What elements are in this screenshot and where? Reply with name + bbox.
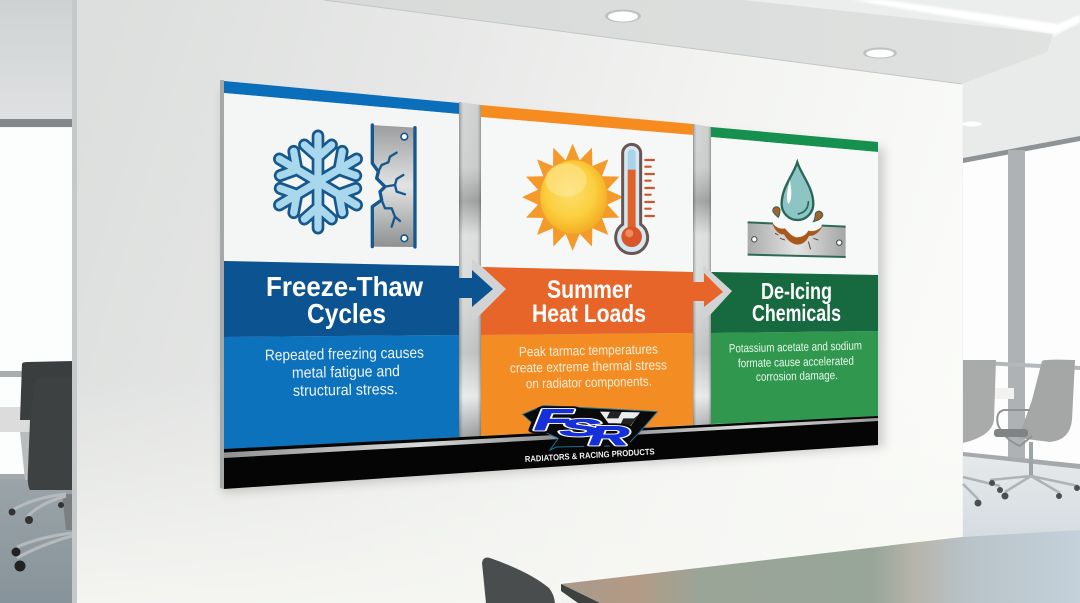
body text: summer heat — [510, 342, 667, 391]
wall sign — [220, 80, 878, 489]
heading: summer heat loads: Heat Loads — [532, 300, 646, 328]
heading: summer heat loads — [532, 276, 646, 328]
dark green heading band — [711, 272, 878, 333]
body text: summer heat: Peak tarmac temperatures — [519, 342, 658, 359]
FSR lettering: R — [589, 421, 630, 451]
body text: freeze-thaw: structural stress. — [293, 381, 398, 400]
FSR lettering: F — [534, 404, 573, 437]
heading: de-icing chemicals: De-Icing — [761, 278, 832, 304]
dark blue heading band — [224, 261, 459, 337]
body text: de-icing: corrosion damage. — [756, 368, 838, 384]
FSR lettering: F — [534, 404, 573, 437]
blue top bar — [224, 81, 459, 114]
body text: de-icing — [729, 338, 862, 384]
white icon area — [224, 93, 459, 266]
ceiling — [324, 0, 1080, 84]
steel divider two — [693, 124, 711, 426]
foreground chair back — [482, 558, 555, 603]
FSR lettering: R — [589, 421, 630, 451]
body text: summer heat: create extreme thermal stress — [510, 357, 667, 376]
heading: freeze-thaw cycles: Cycles — [307, 298, 386, 329]
panel: freeze-thaw — [224, 81, 459, 450]
orange top bar — [481, 105, 693, 135]
downlights — [605, 10, 982, 126]
right floor — [963, 456, 1080, 603]
panel: de-icing — [711, 127, 878, 424]
heading: freeze-thaw cycles: Freeze-Thaw — [266, 271, 424, 302]
FSR lettering: F — [534, 404, 573, 437]
body text: de-icing: Potassium acetate and sodium — [729, 338, 862, 355]
logo: FSR — [523, 404, 657, 464]
left chairs — [8, 361, 73, 572]
green text area — [711, 331, 878, 424]
green top bar — [711, 127, 878, 152]
body text: de-icing: formate cause accelerated — [738, 354, 854, 370]
body text: freeze-thaw — [265, 345, 424, 400]
heading: de-icing chemicals — [752, 278, 841, 326]
icon: thermometer — [616, 144, 654, 254]
icon: snowflake — [273, 136, 363, 228]
right chairs — [963, 360, 1080, 506]
light blue text area — [224, 335, 459, 450]
left meeting table — [0, 407, 31, 432]
body text: summer heat: on radiator components. — [526, 374, 652, 391]
foreground conference table — [561, 530, 1080, 603]
footer band — [224, 416, 878, 489]
FSR lettering: R — [589, 421, 630, 451]
body text: freeze-thaw: Repeated freezing causes — [265, 345, 424, 364]
arrow: blue to orange — [459, 259, 506, 321]
tagline: RADIATORS & RACING PRODUCTS — [525, 446, 655, 464]
ceiling light cove — [744, 0, 1080, 34]
right window bay — [963, 23, 1080, 470]
left floor — [0, 479, 73, 603]
FSR lettering: S — [560, 415, 600, 442]
sign shadow — [222, 90, 884, 493]
FSR lettering: S — [560, 415, 600, 442]
panel: summer heat — [481, 105, 693, 436]
logo swoosh and checkered flag — [523, 406, 657, 450]
orange text area — [481, 333, 693, 436]
icon: sun — [522, 143, 623, 251]
heading: summer heat loads: Summer — [547, 276, 632, 304]
icon: cracked metal plate — [372, 125, 415, 247]
body text: freeze-thaw: metal fatigue and — [292, 363, 400, 382]
arrow: orange to green — [693, 265, 732, 320]
icon: water drop on corroded plate — [748, 162, 846, 257]
FSR lettering — [534, 404, 630, 451]
heading: freeze-thaw cycles — [266, 271, 424, 329]
FSR lettering: S — [560, 415, 600, 442]
sign edge — [220, 80, 224, 489]
left corridor wall — [0, 0, 73, 122]
dark orange heading band — [481, 267, 693, 335]
steel divider one — [459, 102, 481, 438]
heading: de-icing chemicals: Chemicals — [752, 300, 841, 326]
white icon area — [481, 117, 693, 272]
left window — [0, 119, 73, 479]
white icon area — [711, 137, 878, 275]
